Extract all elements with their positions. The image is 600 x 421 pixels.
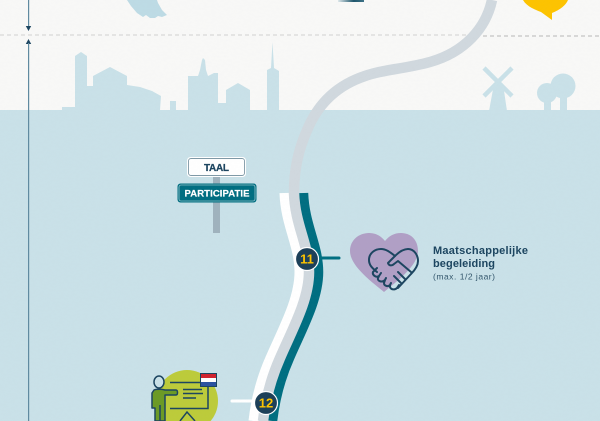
sign: participatie: PARTICIPATIE — [184, 188, 250, 200]
signpost — [178, 157, 256, 233]
post — [213, 177, 220, 233]
teal road — [272, 193, 318, 421]
teacher head — [154, 376, 164, 388]
badge 11 — [296, 248, 318, 270]
icon: heart with handshake — [350, 233, 418, 292]
badge 11: 11 — [300, 252, 314, 266]
text: maatschappelijke begeleiding: (max. 1/2 jaar) — [433, 272, 495, 282]
presentation board — [170, 382, 208, 421]
bird wing tip — [127, 0, 167, 18]
white road — [254, 193, 300, 421]
trees — [537, 74, 576, 111]
text: maatschappelijke begeleiding: begeleiding — [433, 258, 495, 270]
text: maatschappelijke begeleiding: Maatschappelijke — [433, 245, 528, 257]
icon: teacher at presentation board — [152, 370, 218, 421]
connector 12 — [232, 400, 254, 402]
book fragment — [338, 0, 364, 2]
flag — [200, 374, 216, 386]
teacher body — [152, 389, 178, 421]
connector 11 — [318, 256, 339, 260]
skyline silhouette — [62, 42, 279, 111]
text: maatschappelijke begeleiding — [433, 245, 528, 282]
badge 12: 12 — [259, 396, 273, 410]
dashed horizon line — [0, 35, 600, 36]
windmill — [484, 68, 512, 111]
sign: taal: TAAL — [204, 163, 229, 174]
water area — [0, 110, 600, 421]
route roads — [254, 0, 492, 421]
speech bubble — [523, 0, 568, 20]
vertical arrow — [26, 0, 31, 421]
grey road — [263, 0, 492, 421]
badge 12 — [254, 392, 278, 414]
